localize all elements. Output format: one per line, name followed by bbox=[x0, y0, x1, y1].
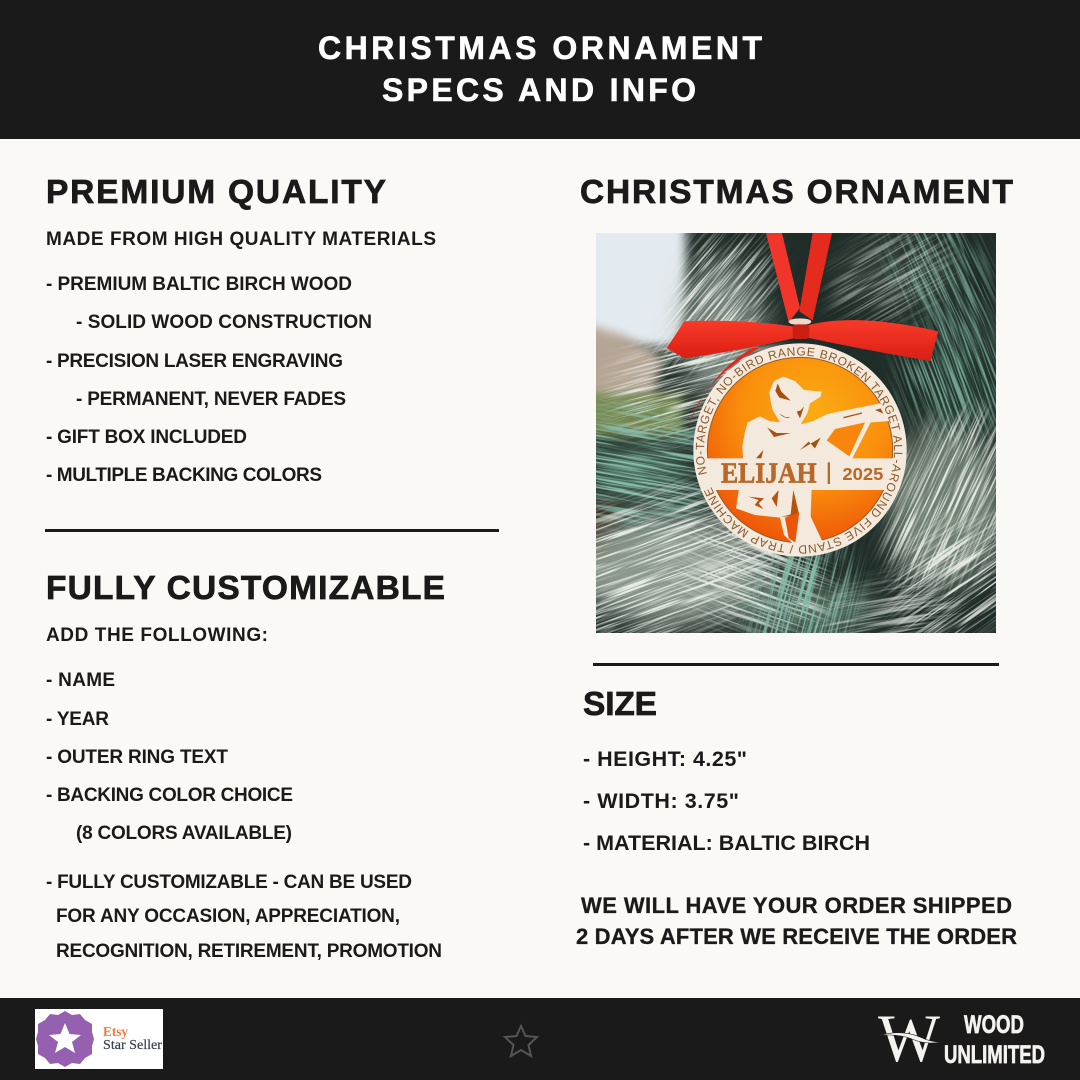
customization list: - BACKING COLOR CHOICE bbox=[46, 785, 293, 806]
customization list: - NAME bbox=[46, 670, 115, 691]
occasions note bbox=[46, 872, 442, 962]
icon: serif W monogram: W bbox=[878, 1000, 941, 1076]
feature list: - MULTIPLE BACKING COLORS bbox=[46, 465, 322, 486]
shipping note: WE WILL HAVE YOUR ORDER SHIPPED bbox=[581, 893, 1012, 918]
heading: christmas ornament: CHRISTMAS ORNAMENT bbox=[580, 174, 1014, 211]
customization list: (8 COLORS AVAILABLE) bbox=[76, 823, 292, 844]
feature list: - GIFT BOX INCLUDED bbox=[46, 427, 247, 448]
leg cutouts bbox=[748, 490, 799, 542]
size list bbox=[583, 747, 870, 855]
upper body and shotgun bbox=[742, 377, 890, 462]
heading: premium quality: PREMIUM QUALITY bbox=[46, 174, 386, 211]
pine needles bbox=[596, 233, 996, 633]
etsy star seller badge: Star Seller bbox=[103, 1037, 163, 1052]
ribbon bow bbox=[667, 318, 938, 426]
title: SPECS AND INFO bbox=[382, 72, 696, 108]
name band with personalization: ELIJAH bbox=[721, 458, 817, 490]
etsy star seller badge: Etsy bbox=[103, 1025, 128, 1040]
feature list: - SOLID WOOD CONSTRUCTION bbox=[76, 312, 372, 333]
name band with personalization bbox=[693, 458, 906, 490]
panel: premium quality bbox=[46, 174, 436, 486]
occasions note: - FULLY CUSTOMIZABLE - CAN BE USED bbox=[46, 872, 412, 893]
title: CHRISTMAS ORNAMENT bbox=[318, 30, 762, 66]
title bbox=[318, 30, 762, 108]
feature list: - PRECISION LASER ENGRAVING bbox=[46, 351, 343, 372]
occasions note: RECOGNITION, RETIREMENT, PROMOTION bbox=[56, 941, 442, 962]
customization list: - OUTER RING TEXT bbox=[46, 747, 228, 768]
panel: size bbox=[583, 686, 870, 855]
wood unlimited logo bbox=[878, 1000, 1045, 1076]
subheading: add the following: ADD THE FOLLOWING: bbox=[46, 625, 268, 646]
ribbon loop bbox=[766, 233, 832, 322]
panel: fully customizable bbox=[46, 570, 445, 962]
feature list: - PREMIUM BALTIC BIRCH WOOD bbox=[46, 274, 352, 295]
icon: outlined star bbox=[505, 1026, 537, 1056]
ring text: NO-TARGET, NO-BIRD RANGE BROKEN TARGET ALL-AROUND FIVE STAND / TRAP MACHINE bbox=[696, 347, 902, 554]
wood unlimited logo: WOOD bbox=[964, 1011, 1024, 1039]
orange gap under the arm bbox=[827, 422, 865, 456]
size list: - MATERIAL: BALTIC BIRCH bbox=[583, 831, 870, 855]
feature list bbox=[46, 274, 372, 486]
ornament wooden ring bbox=[693, 343, 907, 557]
product photo: ornament on pine tree bbox=[596, 233, 996, 633]
customization list: - YEAR bbox=[46, 709, 109, 730]
shipping note: 2 DAYS AFTER WE RECEIVE THE ORDER bbox=[576, 924, 1017, 949]
lower body bbox=[736, 490, 822, 544]
shooter silhouette bbox=[736, 377, 890, 546]
etsy star seller badge bbox=[35, 1009, 163, 1069]
feature list: - PERMANENT, NEVER FADES bbox=[76, 389, 346, 410]
wood unlimited logo: UNLIMITED bbox=[944, 1041, 1045, 1069]
name band with personalization: 2025 bbox=[842, 464, 884, 484]
size list: - WIDTH: 3.75" bbox=[583, 789, 739, 813]
sky and blurred background bbox=[576, 213, 686, 580]
footer band bbox=[0, 998, 1080, 1080]
subheading: materials: MADE FROM HIGH QUALITY MATERIALS bbox=[46, 229, 436, 250]
engraved details bbox=[756, 383, 883, 458]
occasions note: FOR ANY OCCASION, APPRECIATION, bbox=[56, 906, 400, 927]
customization list bbox=[46, 670, 293, 844]
orange backing bbox=[707, 357, 893, 543]
header band bbox=[0, 0, 1080, 139]
shipping note bbox=[576, 893, 1017, 949]
heading: size: SIZE bbox=[583, 686, 657, 723]
pine branch tones bbox=[576, 243, 1003, 633]
size list: - HEIGHT: 4.25" bbox=[583, 747, 747, 771]
heading: fully customizable: FULLY CUSTOMIZABLE bbox=[46, 570, 445, 607]
icon: purple star seal bbox=[36, 1011, 94, 1067]
